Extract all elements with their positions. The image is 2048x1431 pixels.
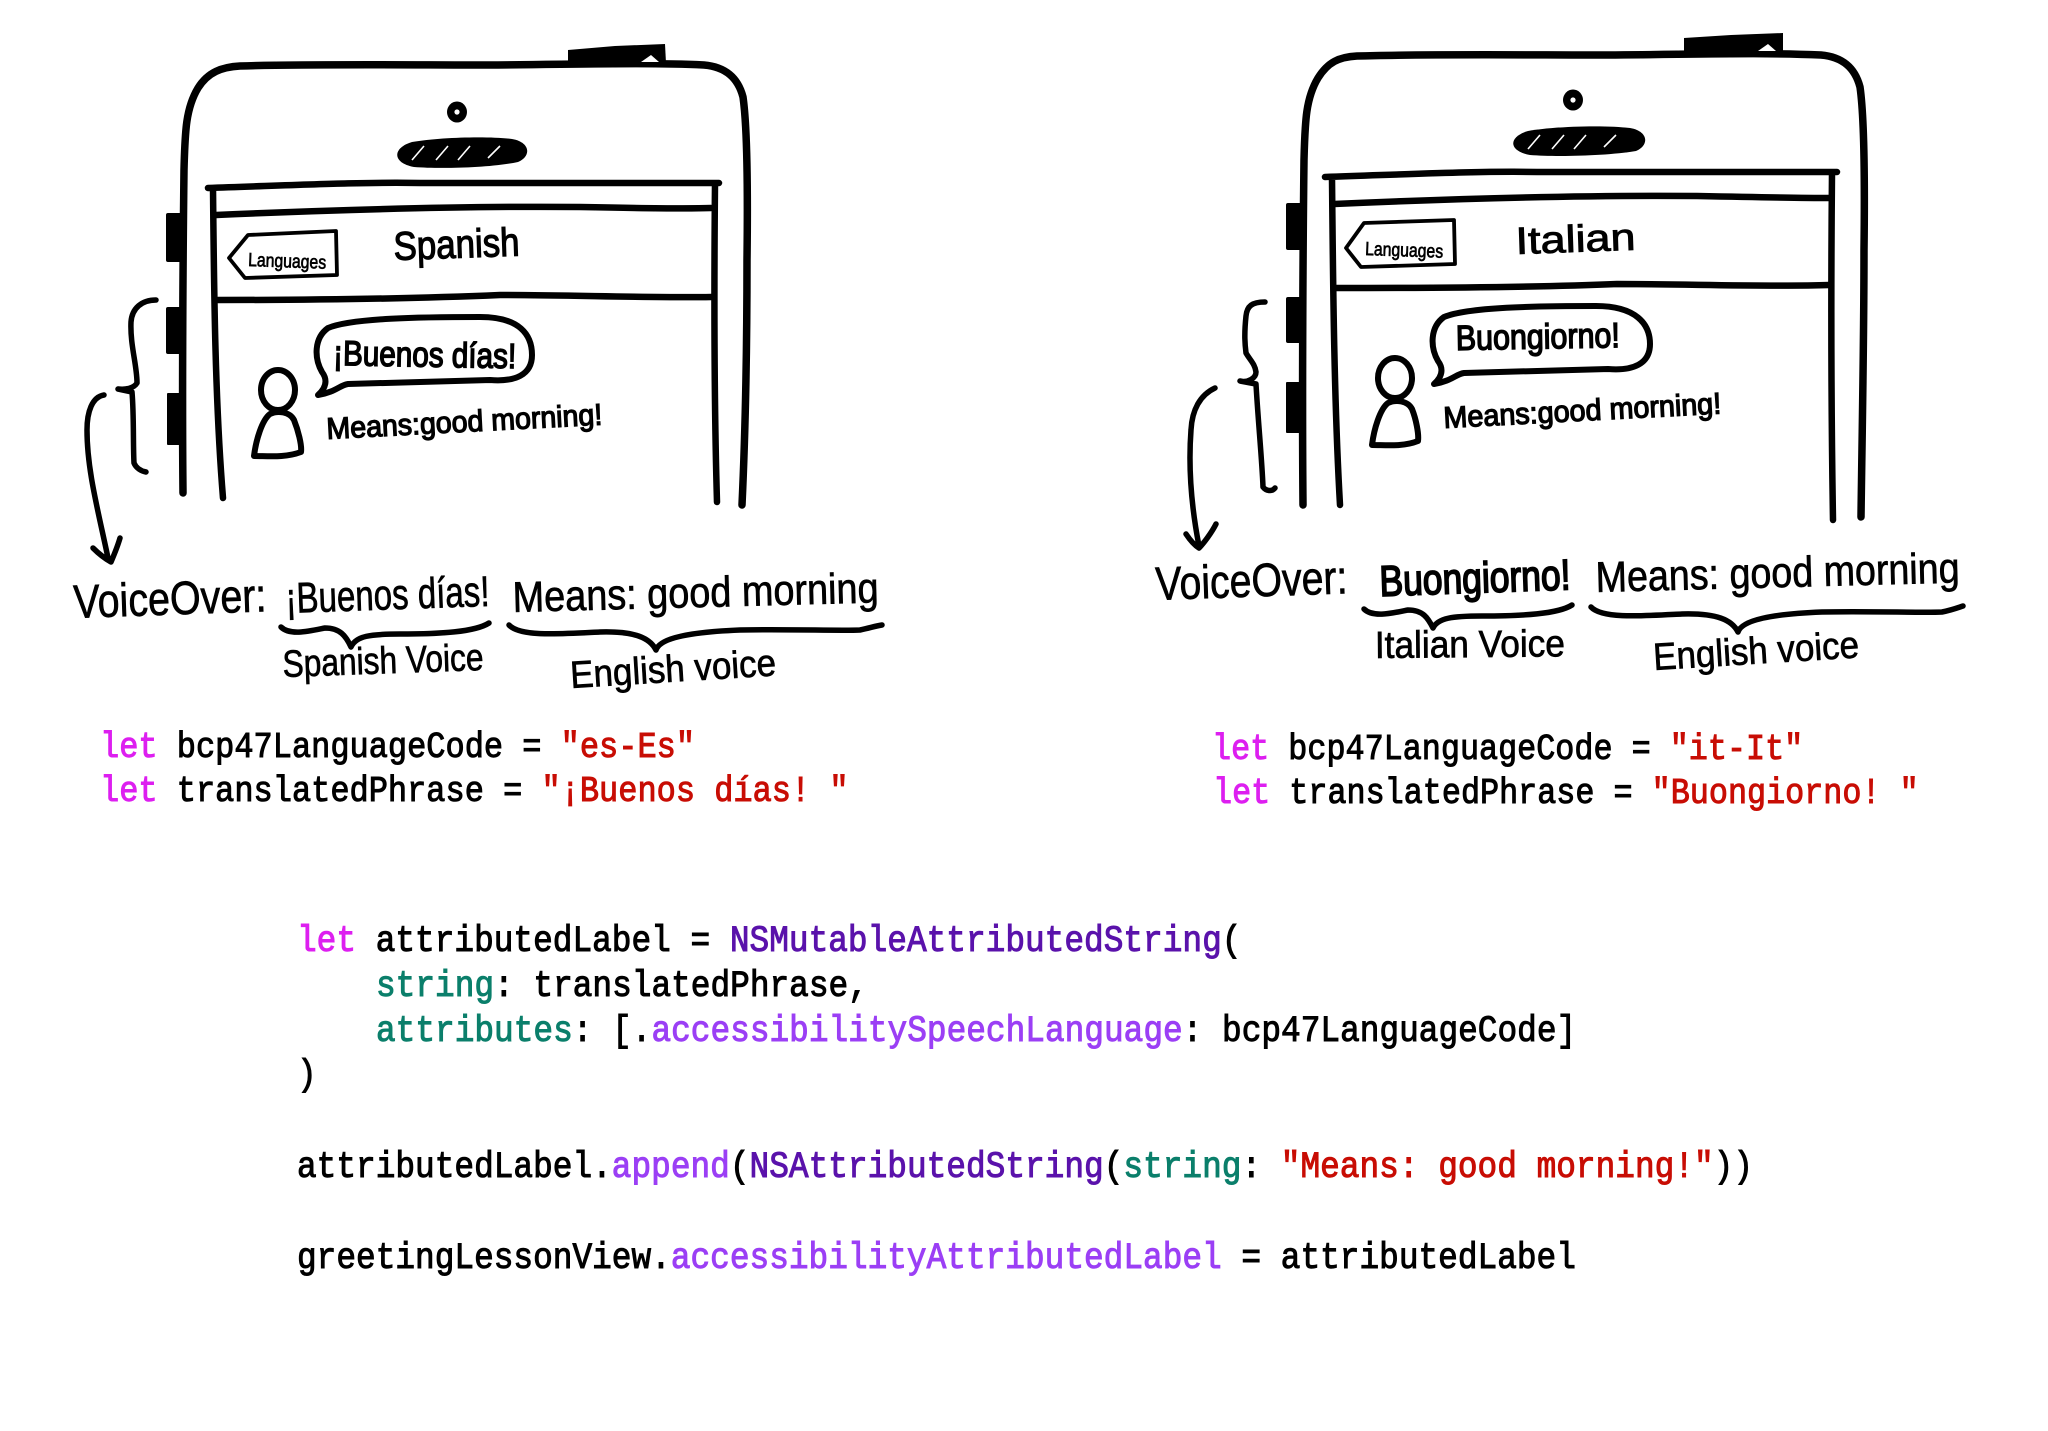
navigation bar [1334, 196, 1829, 288]
navigation bar [216, 207, 711, 300]
code: Italian constants [1212, 730, 1919, 815]
person icon [1372, 358, 1418, 445]
arrow: Spanish phone to VoiceOver [87, 395, 120, 562]
meaning text: Means:good morning! [326, 399, 603, 446]
person icon [254, 370, 301, 456]
brace: Italian voice [1364, 605, 1572, 628]
side buttons [1286, 203, 1303, 433]
code line: assign accessibility label: greetingLessonView.accessibilityAttributedLabel = attributedLabel [297, 1237, 1576, 1280]
screen title: Italian: Italian [1515, 217, 1636, 263]
back button: Languages: Languages [1365, 239, 1444, 263]
code line: attributed label declaration: let attributedLabel = NSMutableAttributedString( [297, 920, 1241, 963]
code: shared attributed label [297, 920, 1753, 1280]
code line: translated phrase: let translatedPhrase = "¡Buenos días! " [100, 771, 849, 813]
speech bubble: ¡Buenos días! [333, 334, 517, 376]
speaker [397, 137, 527, 168]
code: Spanish constants [100, 727, 849, 813]
phrase: Means good morning: Means: good morning [512, 564, 879, 622]
back button: Languages: Languages [248, 250, 327, 274]
arrow: Italian phone to VoiceOver [1186, 388, 1216, 548]
label: VoiceOver: VoiceOver: [1154, 550, 1348, 610]
code line: translated phrase: let translatedPhrase = "Buongiorno! " [1213, 774, 1919, 815]
label: VoiceOver: VoiceOver: [72, 568, 267, 628]
camera [1563, 90, 1583, 110]
speech bubble: Buongiorno! [1455, 316, 1620, 358]
screen title: Spanish: Spanish [393, 221, 520, 269]
code line: closing paren: ) [297, 1054, 317, 1097]
code line: language code: let bcp47LanguageCode = "es-Es" [100, 727, 695, 769]
caption: Spanish Voice: Spanish Voice [282, 637, 484, 686]
speaker [1513, 126, 1645, 156]
phone outline [1303, 54, 1864, 517]
code line: append meaning: attributedLabel.append(NSAttributedString(string: "Means: good morning!")) [297, 1146, 1753, 1189]
code line: string argument: string: translatedPhrase, [376, 965, 868, 1008]
phone outline [183, 64, 747, 505]
back button: Languages [1346, 220, 1455, 267]
camera [447, 102, 467, 122]
side buttons [166, 213, 184, 445]
bracket: Spanish phone volume [118, 300, 156, 472]
phrase: Buongiorno: Buongiorno! [1379, 551, 1571, 606]
speech bubble [317, 317, 532, 395]
caption: English voice: English voice [1652, 624, 1860, 679]
code line: attributes argument: attributes: [.accessibilitySpeechLanguage: bcp47LanguageCode] [376, 1010, 1576, 1053]
VoiceOver output: Spanish [72, 564, 882, 697]
screen outline [1325, 172, 1837, 520]
top button [568, 44, 666, 64]
brace: English voice [509, 625, 882, 650]
bracket: Italian phone volume [1240, 302, 1275, 491]
caption: Italian Voice: Italian Voice [1375, 623, 1565, 667]
caption: English voice: English voice [569, 642, 777, 697]
screen outline [208, 183, 719, 502]
panel: Italian phone sketch [1286, 33, 1864, 520]
phrase: Means good morning: Means: good morning [1595, 544, 1960, 602]
brace: English voice [1591, 606, 1963, 632]
top button [1684, 33, 1783, 53]
phrase: Buenos dias: ¡Buenos días! [285, 568, 490, 623]
meaning text: Means:good morning! [1443, 387, 1722, 435]
back button: Languages [229, 231, 337, 278]
brace: Spanish voice [281, 623, 489, 647]
VoiceOver output: Italian [1154, 544, 1963, 679]
panel: Spanish phone sketch [166, 44, 747, 505]
code line: language code: let bcp47LanguageCode = "it-It" [1212, 730, 1803, 771]
speech bubble [1433, 306, 1650, 384]
